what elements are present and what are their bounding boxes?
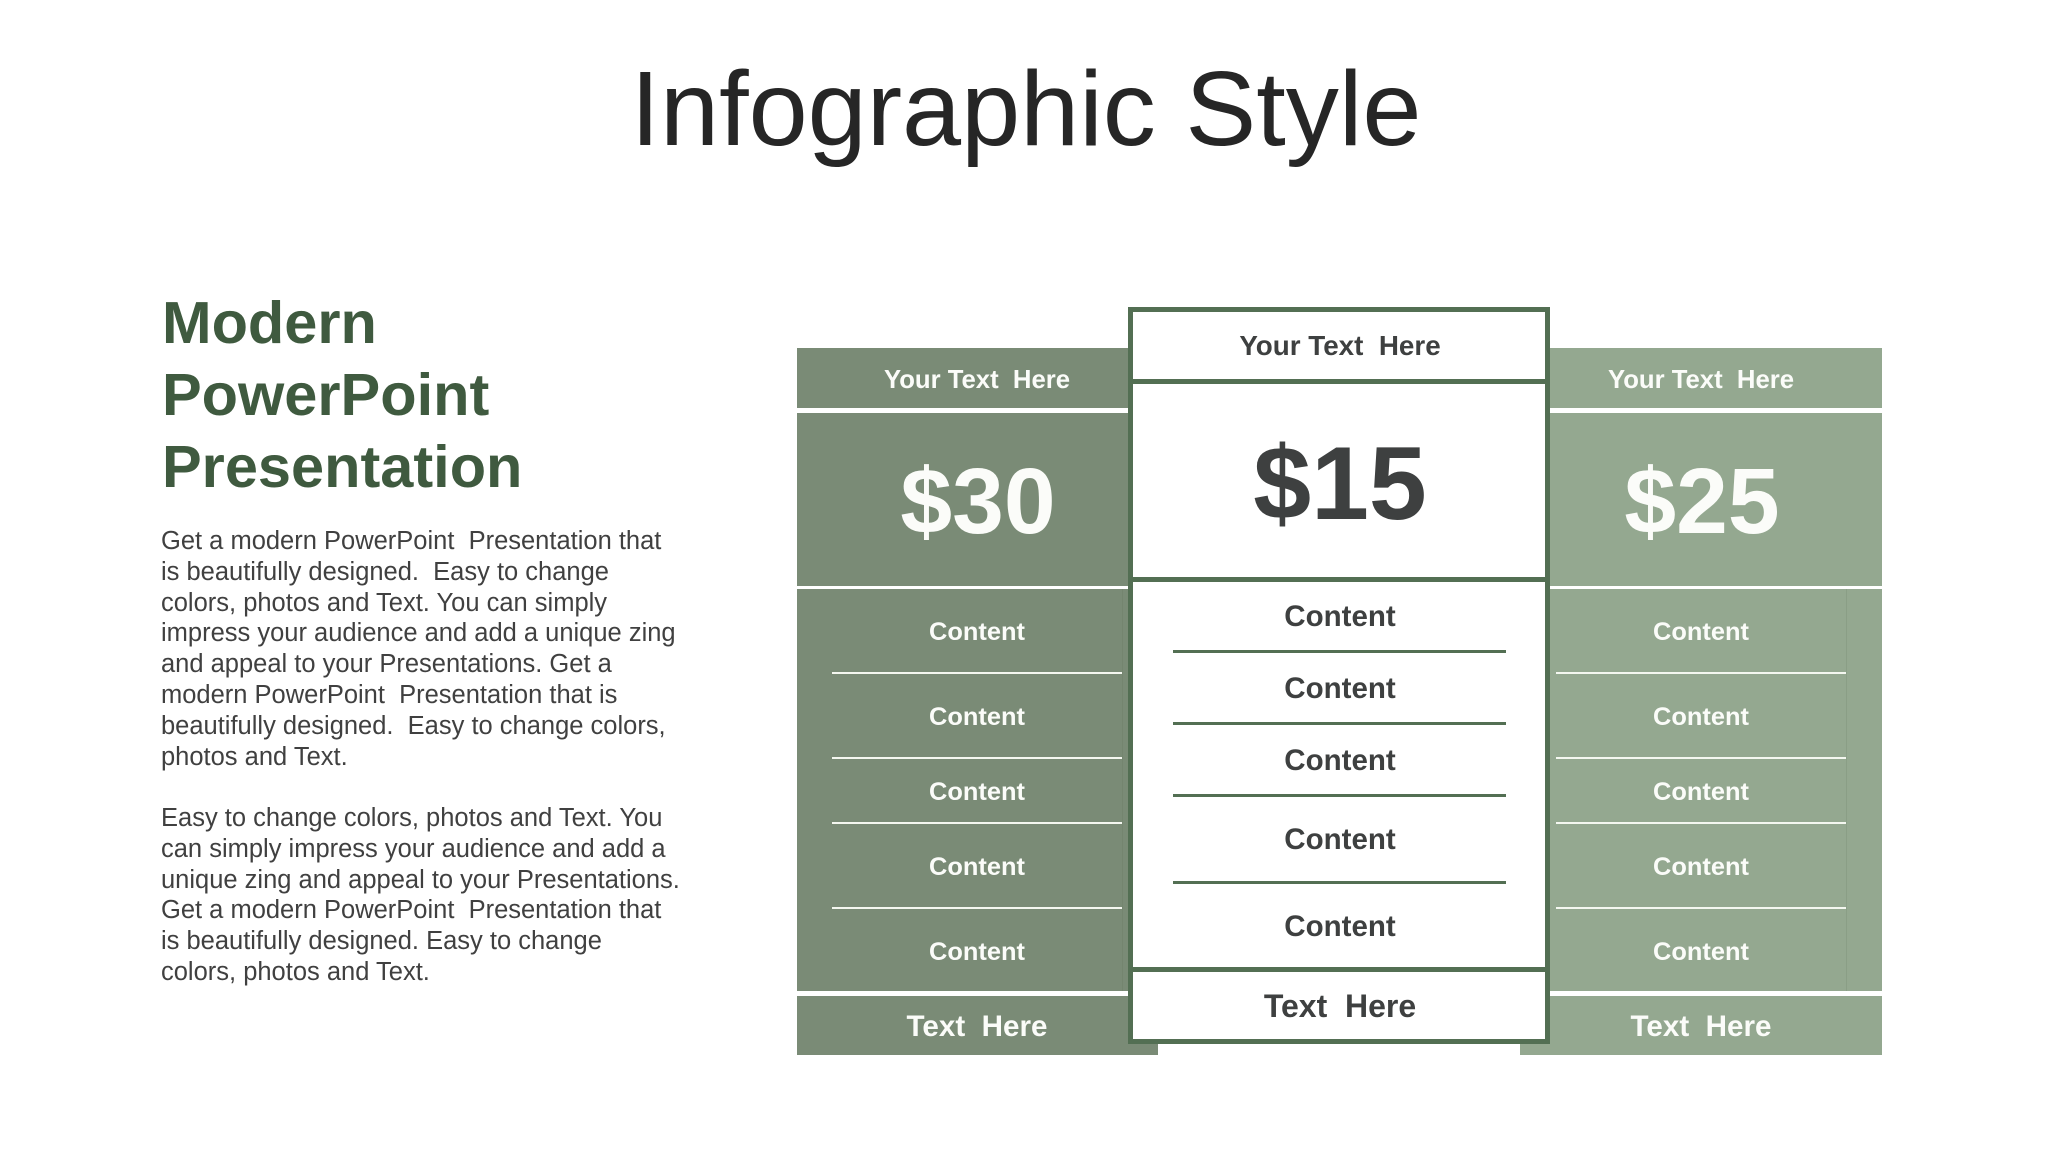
price: $30 (900, 449, 1056, 553)
row label 4: Content (929, 853, 1025, 881)
footer background (797, 996, 1158, 1055)
footer label: Text Here (1631, 1010, 1771, 1043)
heading: Presentation (162, 433, 522, 500)
footer label: Text Here (1264, 988, 1416, 1024)
row label 3: Content (1653, 778, 1749, 806)
row label 5: Content (1284, 910, 1396, 943)
heading (162, 289, 522, 500)
row label 2: Content (1653, 703, 1749, 731)
price divider (1133, 577, 1545, 582)
footer label: Text Here (907, 1010, 1047, 1043)
row label 1: Content (1284, 600, 1396, 633)
price: $25 (1624, 449, 1780, 553)
panel: $15 highlighted pricing column (1128, 307, 1550, 1044)
header divider (1133, 379, 1545, 384)
row label 1: Content (929, 618, 1025, 646)
row label 3: Content (1284, 744, 1396, 777)
header label: Your Text Here (1239, 330, 1441, 361)
price background (1545, 413, 1882, 586)
row label 4: Content (1653, 853, 1749, 881)
row label 1: Content (1653, 618, 1749, 646)
price: $15 (1253, 426, 1427, 542)
heading: PowerPoint (162, 361, 489, 428)
footer background (1520, 996, 1882, 1055)
row label 3: Content (929, 778, 1025, 806)
row label 5: Content (1653, 938, 1749, 966)
column header background (1545, 348, 1882, 408)
content rows background (797, 589, 1132, 991)
column header background (797, 348, 1132, 408)
row label 5: Content (929, 938, 1025, 966)
content rows background (1545, 589, 1882, 991)
body text: second paragraph: Easy to change colors, photos and Text. You can simply impress your audience and add a unique zing and appeal to your Presentations. Get a modern PowerPoint Presentation that is beautifully designed. Easy to change colors, photos and Text. (161, 804, 680, 986)
row label 4: Content (1284, 823, 1396, 856)
row label 2: Content (1284, 672, 1396, 705)
panel: $25 pricing column (1520, 348, 1882, 1055)
header label: Your Text Here (1608, 366, 1794, 394)
header label: Your Text Here (884, 366, 1070, 394)
heading: Modern (162, 289, 377, 356)
panel: $30 pricing column (797, 348, 1158, 1055)
footer divider (1133, 967, 1545, 972)
price background (797, 413, 1132, 586)
row label 2: Content (929, 703, 1025, 731)
title: Infographic Style (631, 49, 1421, 168)
body text: first paragraph: Get a modern PowerPoint Presentation that is beautifully designed. Easy to change colors, photos and Text. You can simply impress your audience and add a unique zing and appeal to your Presentations. Get a modern PowerPoint Presentation that is beautifully designed. Easy to change colors, photos and Text. (161, 527, 676, 771)
